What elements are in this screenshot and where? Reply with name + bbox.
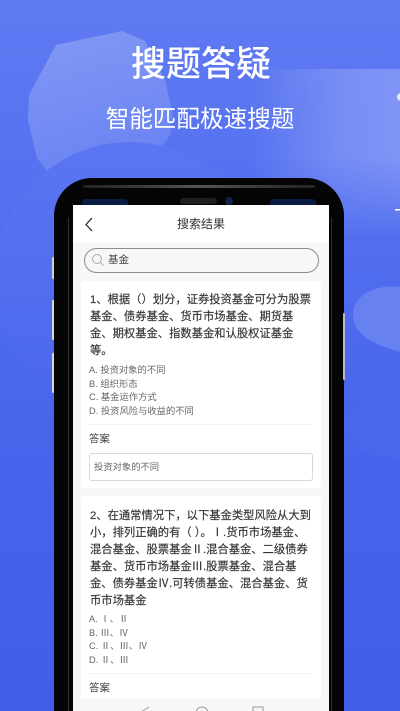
back arrow xyxy=(85,218,92,232)
question 2 text: 2、在通常情况下，以下基金类型风险从大到 xyxy=(90,510,311,522)
question 1 text: 等。 xyxy=(90,345,113,357)
question 2 text: 基金、货币市场基金Ⅲ.股票基金、混合基 xyxy=(90,561,296,573)
question 2 options xyxy=(89,614,147,664)
question 2 options: A. Ⅰ、Ⅱ xyxy=(89,614,128,624)
question 2 text: 金、债券基金Ⅳ.可转债基金、混合基金、货 xyxy=(90,578,308,590)
question 1 options: B. 组织形态 xyxy=(89,378,138,388)
question 2 text: 币市场基金 xyxy=(90,595,146,607)
question 2 options: B. Ⅲ、Ⅳ xyxy=(89,628,128,638)
title: 搜题答疑 xyxy=(131,45,271,84)
camera xyxy=(225,197,233,205)
side button left lower xyxy=(52,353,54,393)
side button right xyxy=(343,313,345,380)
question 2 options: D. Ⅱ、Ⅲ xyxy=(89,654,129,664)
app screen xyxy=(73,205,329,711)
question 1 options: D. 投资风险与收益的不同 xyxy=(89,406,194,416)
inner bezel edge xyxy=(68,218,332,711)
question 1 options: C. 基金运作方式 xyxy=(89,392,157,402)
answer box 1 xyxy=(89,453,313,481)
bottom navigation icons xyxy=(142,706,264,711)
answer label 1: 答案 xyxy=(89,433,110,445)
background with organic shapes xyxy=(0,0,400,352)
answer box 1: 投资对象的不同 xyxy=(94,462,159,472)
phone mockup xyxy=(54,178,344,711)
speaker xyxy=(180,198,217,204)
question 1 text xyxy=(90,293,311,357)
screen title: 搜索结果 xyxy=(177,217,225,231)
phone top highlight xyxy=(83,185,315,188)
subtitle: 智能匹配极速搜题 xyxy=(106,107,294,133)
status bar hints xyxy=(82,199,128,205)
question card 1 xyxy=(81,281,321,488)
bottom navigation bar xyxy=(73,699,329,711)
navigation bar xyxy=(73,205,329,243)
search box xyxy=(84,248,319,273)
question 2 text: 小，排列正确的有（ ）。Ⅰ.货币市场基金、 xyxy=(90,527,305,539)
question card 2 xyxy=(81,496,321,711)
question 1 options: A. 投资对象的不同 xyxy=(89,365,165,375)
question 1 text: 1、根据（）划分，证券投资基金可分为股票 xyxy=(90,294,311,306)
question 1 options xyxy=(89,365,194,416)
question 2 text xyxy=(90,509,311,607)
question 1 text: 基金、债券基金、货币市场基金、期货基 xyxy=(90,311,293,323)
search icon xyxy=(92,254,104,266)
answer label 2: 答案 xyxy=(89,682,110,694)
side button left middle xyxy=(52,300,54,340)
search text: 基金 xyxy=(108,254,129,266)
question 2 options: C. Ⅱ、Ⅲ、Ⅳ xyxy=(89,641,147,651)
side button left upper xyxy=(52,257,54,279)
question 1 text: 金、期权基金、指数基金和认股权证基金 xyxy=(90,328,293,340)
question 2 text: 混合基金、股票基金Ⅱ.混合基金、二级债券 xyxy=(90,544,308,556)
